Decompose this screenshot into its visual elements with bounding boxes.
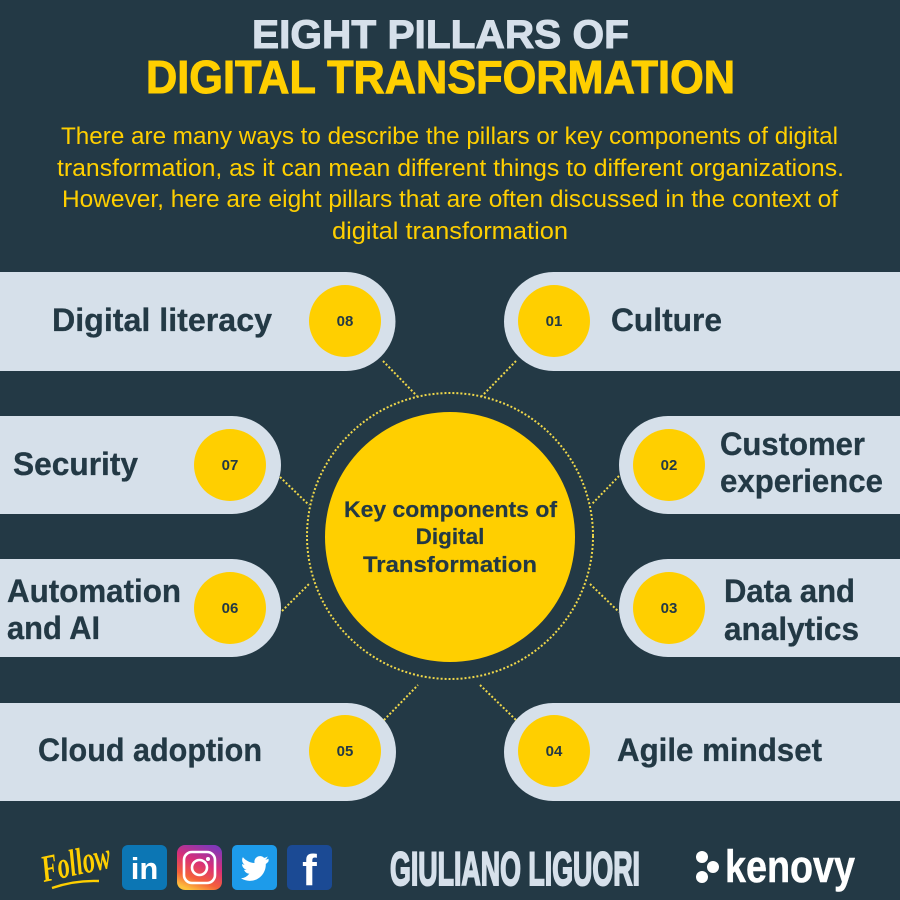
intro text: transformation, as it can mean different things to different organizations.: [57, 155, 844, 182]
pillar 05: cloud adoption: 05: [337, 743, 353, 760]
pillar 04: agile mindset: [504, 703, 900, 801]
pillar 03: data and analytics: Data and: [724, 573, 855, 609]
title: [146, 13, 735, 103]
dotted ring: [307, 393, 593, 679]
intro text: digital transformation: [332, 218, 568, 245]
pillar 01: culture: [504, 272, 900, 371]
pillar 08: digital literacy: [0, 272, 396, 371]
pillar 05: cloud adoption: Cloud adoption: [38, 732, 262, 768]
pillar 08: digital literacy: Digital literacy: [52, 302, 272, 338]
pillar 03: data and analytics: [619, 559, 900, 657]
title: DIGITAL TRANSFORMATION: [146, 51, 735, 103]
center circle: Key components of: [344, 497, 558, 522]
pillar 06: automation and AI: Automation: [7, 573, 181, 609]
icon: linkedin: in: [131, 851, 158, 886]
pillar 02: customer experience: Customer: [720, 426, 865, 462]
icon: facebook: f: [302, 846, 317, 895]
author name: GIULIANO LIGUORI: [390, 842, 640, 895]
connector lines: [280, 361, 619, 720]
follow label: Follow: [37, 835, 115, 891]
pillar 02: customer experience: [619, 416, 900, 514]
center circle: Transformation: [363, 552, 537, 577]
icon: twitter: [232, 845, 277, 890]
pillar 07: security: [0, 416, 281, 514]
title: EIGHT PILLARS OF: [252, 13, 629, 57]
pillar 01: culture: 01: [546, 313, 562, 330]
pillar 04: agile mindset: Agile mindset: [617, 732, 822, 768]
intro text: There are many ways to describe the pillars or key components of digital: [61, 123, 838, 150]
intro text: [57, 123, 844, 245]
icon: linkedin: [122, 845, 167, 890]
follow label: [37, 835, 115, 891]
pillar 03: data and analytics: 03: [661, 600, 677, 617]
logo: kenovy: kenovy: [725, 841, 855, 892]
pillar 08: digital literacy: 08: [337, 313, 353, 330]
icon: facebook: [287, 845, 332, 895]
pillar 07: security: Security: [13, 446, 138, 482]
pillar 05: cloud adoption: [0, 703, 396, 801]
pillar 03: data and analytics: analytics: [724, 611, 859, 647]
pillar 01: culture: Culture: [611, 302, 722, 338]
pillar 06: automation and AI: 06: [222, 600, 238, 617]
intro text: However, here are eight pillars that are often discussed in the context of: [62, 186, 838, 213]
pillar 06: automation and AI: and AI: [7, 610, 100, 646]
center circle: Digital: [416, 524, 484, 549]
icon: instagram: [177, 845, 222, 890]
pillar 04: agile mindset: 04: [546, 743, 563, 760]
pillar 07: security: 07: [222, 457, 238, 474]
pillar 06: automation and AI: [0, 559, 281, 657]
pillar 02: customer experience: experience: [720, 463, 883, 499]
pillar 02: customer experience: 02: [661, 457, 677, 474]
center circle: [325, 412, 575, 662]
